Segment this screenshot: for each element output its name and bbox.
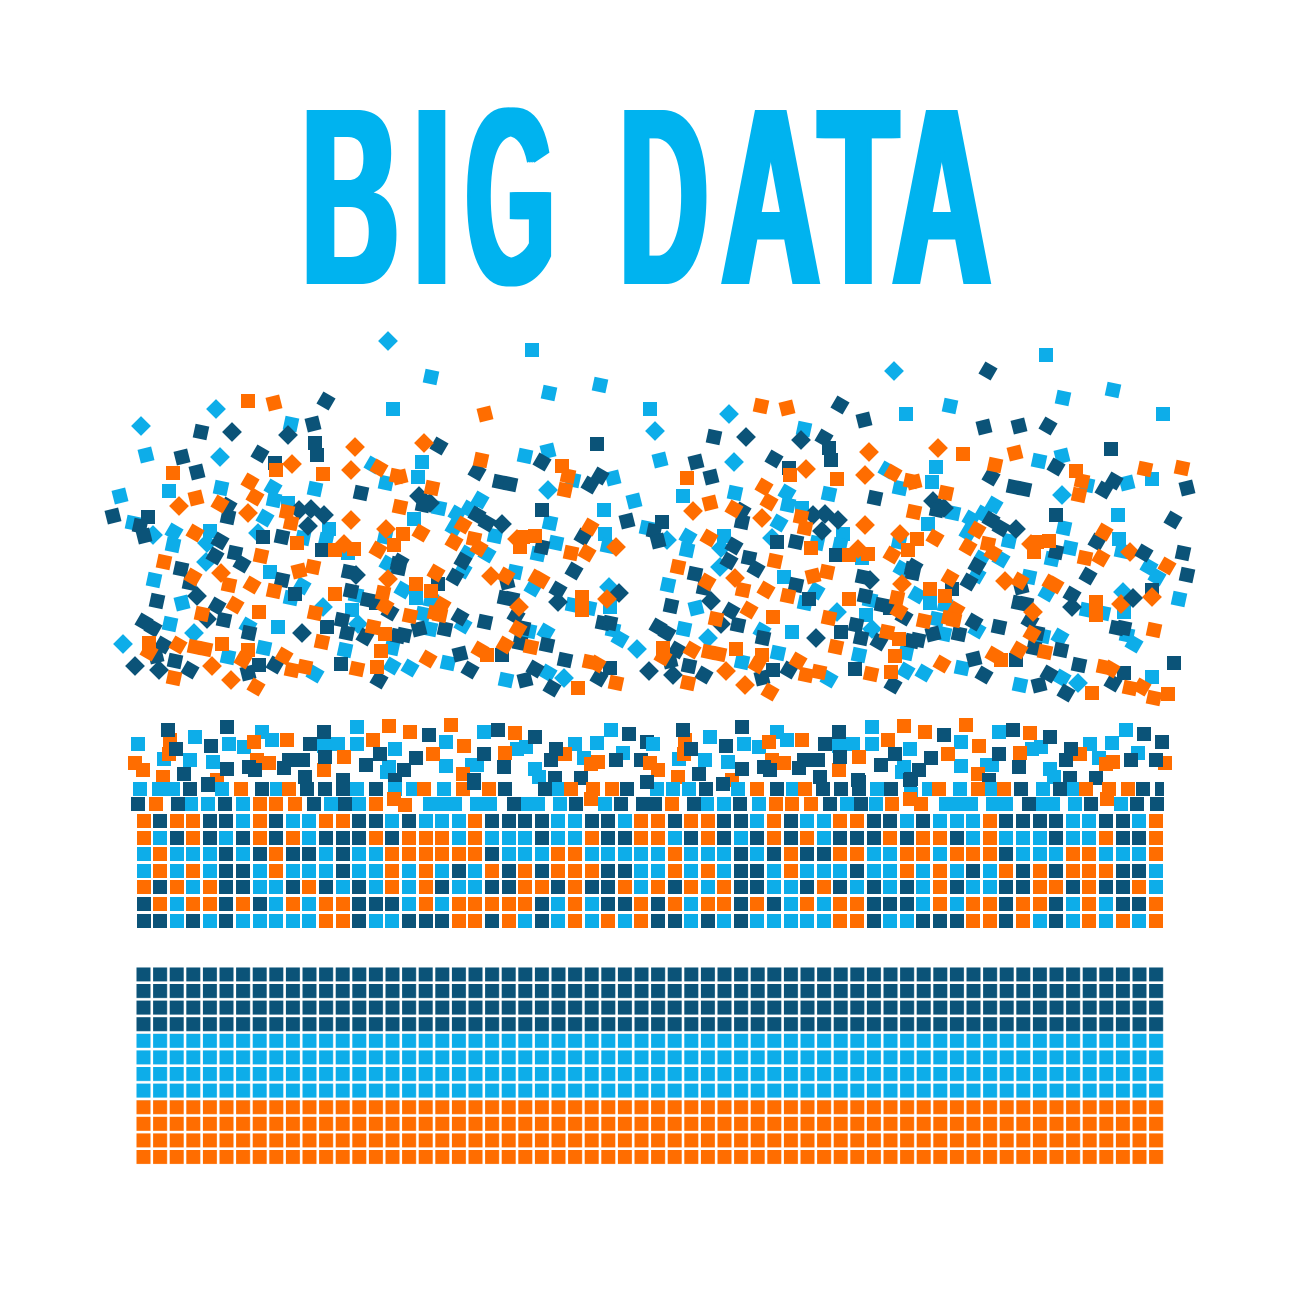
mixed colour mosaic (137, 814, 1163, 928)
title: D (620, 55, 708, 338)
title: A (893, 55, 990, 338)
title: G (466, 55, 555, 338)
title: T (818, 55, 897, 338)
title (302, 55, 992, 338)
loose aligned squares falling onto the mosaic (128, 718, 1172, 812)
title: I (414, 55, 450, 338)
title: A (722, 55, 819, 338)
scattered data squares (104, 331, 1196, 706)
title: B (302, 55, 398, 338)
